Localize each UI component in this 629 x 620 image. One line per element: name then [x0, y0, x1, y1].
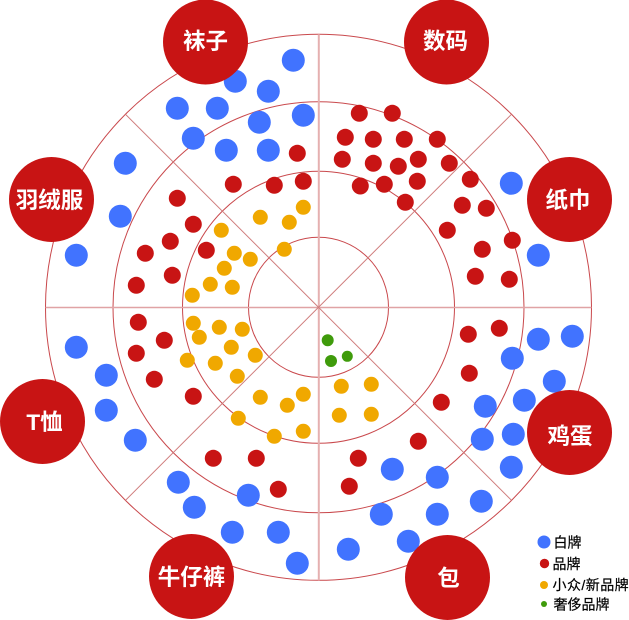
label: T恤: T恤	[26, 410, 63, 435]
legend item: 小众/新品牌: 小众/新品牌	[552, 577, 629, 593]
label: 鸡蛋	[527, 390, 612, 475]
legend item: 品牌: 品牌	[552, 556, 580, 572]
label: 包: 包	[437, 566, 460, 591]
label: 袜子	[163, 0, 248, 84]
label: 数码: 数码	[423, 29, 468, 54]
label: 袜子: 袜子	[183, 29, 228, 54]
legend	[538, 534, 629, 612]
label: 羽绒服	[9, 157, 94, 242]
dots: 纸巾	[439, 171, 550, 288]
label: 包	[405, 535, 490, 620]
legend item: 白牌: 白牌	[554, 534, 582, 550]
label: T恤	[0, 379, 85, 464]
label: 纸巾	[527, 157, 612, 242]
label: 鸡蛋: 鸡蛋	[547, 424, 593, 449]
label: 羽绒服: 羽绒服	[16, 188, 84, 213]
dots: 羽绒服	[65, 152, 258, 303]
label: 牛仔裤: 牛仔裤	[158, 565, 225, 590]
dots: 袜子	[166, 49, 315, 257]
dots: 数码	[334, 105, 458, 211]
legend item: 奢侈品牌: 奢侈品牌	[554, 596, 610, 612]
label: 数码	[404, 0, 489, 84]
radial grid	[46, 34, 592, 580]
label: 纸巾: 纸巾	[545, 188, 591, 213]
dots: 包	[322, 334, 493, 561]
dots: 牛仔裤	[167, 387, 311, 575]
dots: 鸡蛋	[433, 320, 584, 479]
dots: T恤	[65, 314, 263, 452]
label: 牛仔裤	[149, 534, 234, 619]
